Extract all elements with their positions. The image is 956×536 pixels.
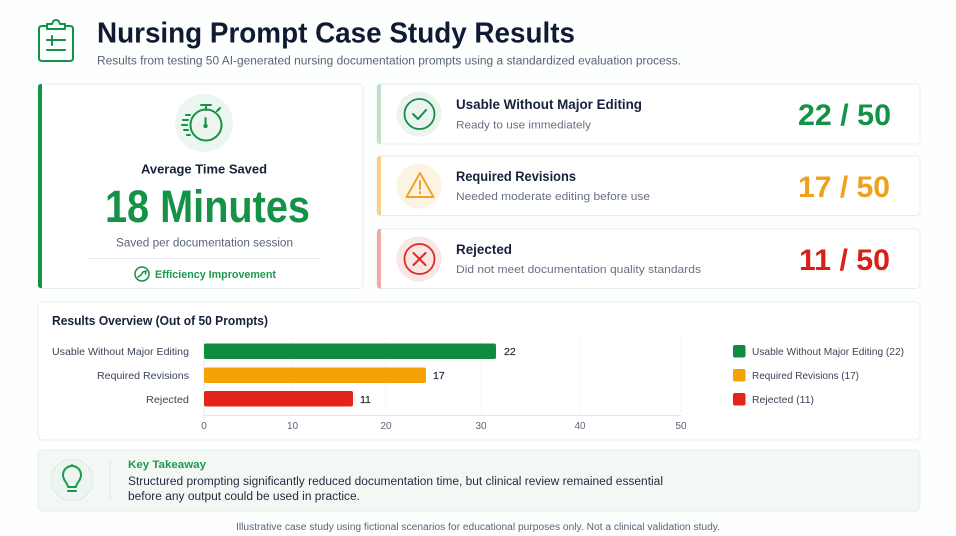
- panel: key takeaway: [38, 450, 920, 511]
- bar chart: 0: [201, 421, 207, 432]
- bar chart: 11: [360, 394, 371, 406]
- icon: warning: [396, 164, 442, 208]
- description: Ready to use immediately: [456, 120, 592, 132]
- subtitle: Results from testing 50 AI-generated nursing documentation prompts using a standardized evaluation process.: [97, 56, 681, 68]
- takeaway text: [128, 476, 663, 503]
- bar chart: 20: [380, 421, 392, 432]
- bar chart: 10: [287, 421, 298, 432]
- panel: results overview: [38, 302, 920, 440]
- bar chart: Required Revisions: [97, 370, 189, 382]
- icon: efficiency gauge: [135, 267, 149, 281]
- label: efficiency improvement: Efficiency Improvement: [155, 269, 276, 281]
- icon: check: [396, 92, 442, 136]
- heading: Rejected: [456, 242, 512, 257]
- count: 17 / 50: [798, 171, 890, 204]
- bar chart: 17: [433, 370, 445, 382]
- panel: revisions: [377, 156, 920, 216]
- description: Did not meet documentation quality standards: [456, 264, 702, 276]
- bar chart: Usable Without Major Editing: [52, 346, 189, 358]
- panel: rejected: [377, 229, 920, 288]
- heading: Usable Without Major Editing: [456, 97, 642, 112]
- legend: Usable Without Major Editing (22): [752, 346, 904, 358]
- bar chart: Rejected: [146, 394, 189, 406]
- label: average time saved: Average Time Saved: [141, 162, 267, 176]
- icon: clipboard: [39, 20, 73, 61]
- legend: Rejected (11): [752, 394, 814, 406]
- panel: average time saved: [38, 84, 363, 288]
- takeaway heading: Key Takeaway: [128, 459, 207, 471]
- icon: stopwatch: [175, 94, 233, 152]
- bar chart: 30: [475, 421, 487, 432]
- icon: cross: [396, 236, 442, 282]
- bar chart: 22: [504, 346, 516, 358]
- takeaway text: before any output could be used in practice.: [128, 491, 360, 503]
- caption: Saved per documentation session: [116, 238, 293, 250]
- takeaway text: Structured prompting significantly reduced documentation time, but clinical review remained essential: [128, 476, 663, 488]
- title: Nursing Prompt Case Study Results: [97, 18, 575, 50]
- legend: Required Revisions (17): [752, 370, 859, 382]
- description: Needed moderate editing before use: [456, 191, 650, 203]
- metric: 18 minutes: 18 Minutes: [105, 181, 310, 232]
- legend: [733, 345, 904, 406]
- panel: usable: [377, 84, 920, 144]
- footer note: Illustrative case study using fictional scenarios for educational purposes only. Not a clinical validation study.: [236, 522, 720, 533]
- heading: Required Revisions: [456, 169, 576, 184]
- icon: light bulb: [51, 459, 93, 501]
- chart heading: Results Overview (Out of 50 Prompts): [52, 314, 268, 328]
- count: 22 / 50: [798, 99, 891, 132]
- count: 11 / 50: [799, 244, 890, 277]
- bar chart: 40: [574, 421, 586, 432]
- bar chart: [52, 338, 687, 432]
- bar chart: 50: [675, 421, 687, 432]
